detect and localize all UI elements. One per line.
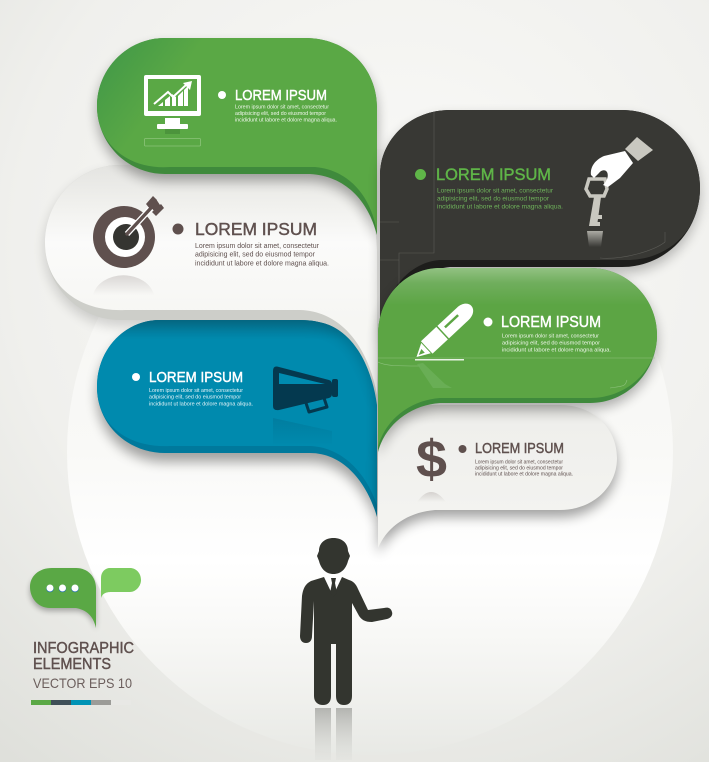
text: dark key bubble body: adipisicing elit, sed do eiusmod tempor: [437, 196, 549, 202]
logo heading: [33, 640, 134, 673]
panel: dark key bubble: [380, 110, 700, 351]
logo heading: ELEMENTS: [33, 656, 111, 673]
text: white dollar bubble body: incididunt ut labore et dolore magna aliqua.: [475, 472, 573, 478]
text: green pen bubble body: Lorem ipsum dolor sit amet, consectetur: [502, 334, 599, 340]
text: green chart bubble body: adipisicing elit, sed do eiusmod tempor: [235, 111, 326, 117]
icon: monitor chart: [144, 75, 201, 146]
icon: pen: [411, 300, 477, 388]
text: dark key bubble body: [437, 188, 563, 210]
text: white target bubble body: [195, 243, 329, 267]
text: blue bubble body: incididunt ut labore et dolore magna aliqua.: [149, 401, 253, 407]
text: green pen bubble body: [502, 334, 611, 354]
panel: blue megaphone bubble: [97, 320, 377, 524]
text: white dollar bubble body: Lorem ipsum dolor sit amet, consectetur: [475, 460, 563, 466]
icon: dollar sign: $: [416, 430, 447, 489]
text: blue bubble body: adipisicing elit, sed do eiusmod tempor: [149, 395, 241, 401]
logo heading: INFOGRAPHIC: [33, 640, 134, 657]
panel: white dollar bubble: [378, 405, 617, 555]
text: white dollar bubble body: adipisicing elit, sed do eiusmod tempor: [475, 466, 563, 472]
logo colour bar: [31, 700, 131, 705]
text: green chart bubble body: Lorem ipsum dolor sit amet, consectetur: [235, 104, 329, 110]
text: white dollar bubble body: [475, 460, 573, 478]
text: green chart bubble body: incididunt ut labore et dolore magna aliqua.: [235, 118, 337, 124]
text: white target bubble body: incididunt ut labore et dolore magna aliqua.: [195, 260, 329, 267]
panel: white target bubble: [45, 165, 377, 411]
text: blue bubble body: Lorem ipsum dolor sit amet, consectetur: [149, 388, 243, 394]
icon: megaphone: [273, 366, 338, 446]
heading: white target bubble: LOREM IPSUM: [195, 219, 317, 239]
icon: target with arrow: [93, 196, 164, 295]
text: green pen bubble body: adipisicing elit, sed do eiusmod tempor: [502, 340, 600, 346]
panel: green pen bubble: [378, 268, 657, 458]
text: blue bubble body: [149, 388, 253, 407]
panel: green chart bubble: [97, 38, 377, 242]
text: white target bubble body: Lorem ipsum dolor sit amet, consectetur: [195, 243, 320, 250]
heading: green pen bubble: LOREM IPSUM: [501, 314, 601, 331]
text: green chart bubble body: [235, 104, 337, 124]
figure: businessman: [300, 538, 392, 760]
heading: white dollar bubble: LOREM IPSUM: [475, 441, 564, 457]
heading: blue bubble: LOREM IPSUM: [149, 370, 243, 386]
text: dark key bubble body: incididunt ut labore et dolore magna aliqua.: [437, 204, 563, 210]
text: green pen bubble body: incididunt ut labore et dolore magna aliqua.: [502, 348, 611, 354]
icon: hand holding key: [586, 137, 653, 247]
text: dark key bubble body: Lorem ipsum dolor sit amet, consectetur: [437, 188, 553, 194]
text: white target bubble body: adipisicing elit, sed do eiusmod tempor: [195, 252, 316, 259]
background disc: [67, 149, 673, 755]
logo subheading: VECTOR EPS 10: [33, 675, 132, 691]
heading: dark key bubble: LOREM IPSUM: [436, 165, 551, 184]
logo: speech bubbles: [30, 568, 141, 630]
heading: green chart bubble: LOREM IPSUM: [235, 88, 327, 104]
